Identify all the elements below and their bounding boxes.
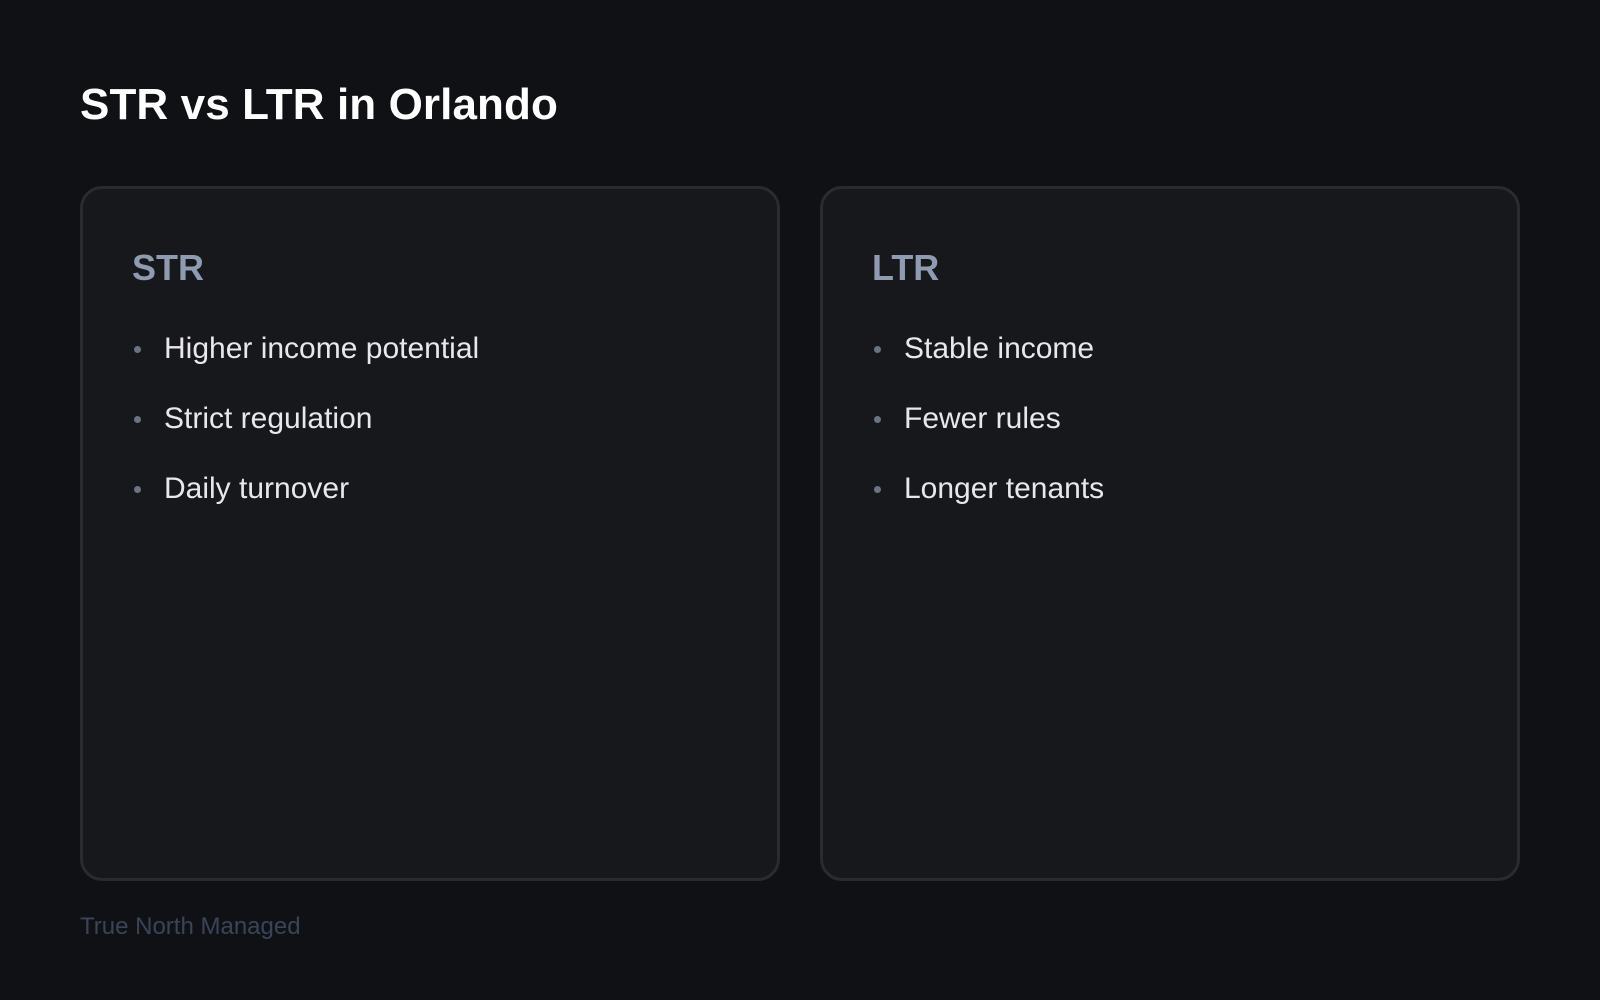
panel: LTR: Stable income	[904, 332, 1094, 365]
panel: STR: Daily turnover	[164, 472, 349, 505]
panel: STR	[80, 186, 780, 881]
title: STR vs LTR in Orlando	[80, 80, 558, 129]
bullet: regulation	[134, 402, 372, 435]
heading: STR: STR	[132, 247, 204, 288]
bullet: stable income	[874, 332, 1094, 365]
bullet: longer tenants	[874, 472, 1104, 505]
heading: LTR: LTR	[872, 247, 939, 288]
panel: LTR: Longer tenants	[904, 472, 1104, 505]
panel: STR: Strict regulation	[164, 402, 372, 435]
list: STR points	[134, 332, 479, 505]
panel: LTR	[820, 186, 1520, 881]
footer: True North Managed	[80, 913, 301, 940]
bullet: higher income	[134, 332, 479, 365]
bullet: turnover	[134, 472, 349, 505]
list: LTR points	[874, 332, 1104, 505]
panel: LTR: Fewer rules	[904, 402, 1061, 435]
bullet: fewer rules	[874, 402, 1061, 435]
panel: STR: Higher income potential	[164, 332, 479, 365]
